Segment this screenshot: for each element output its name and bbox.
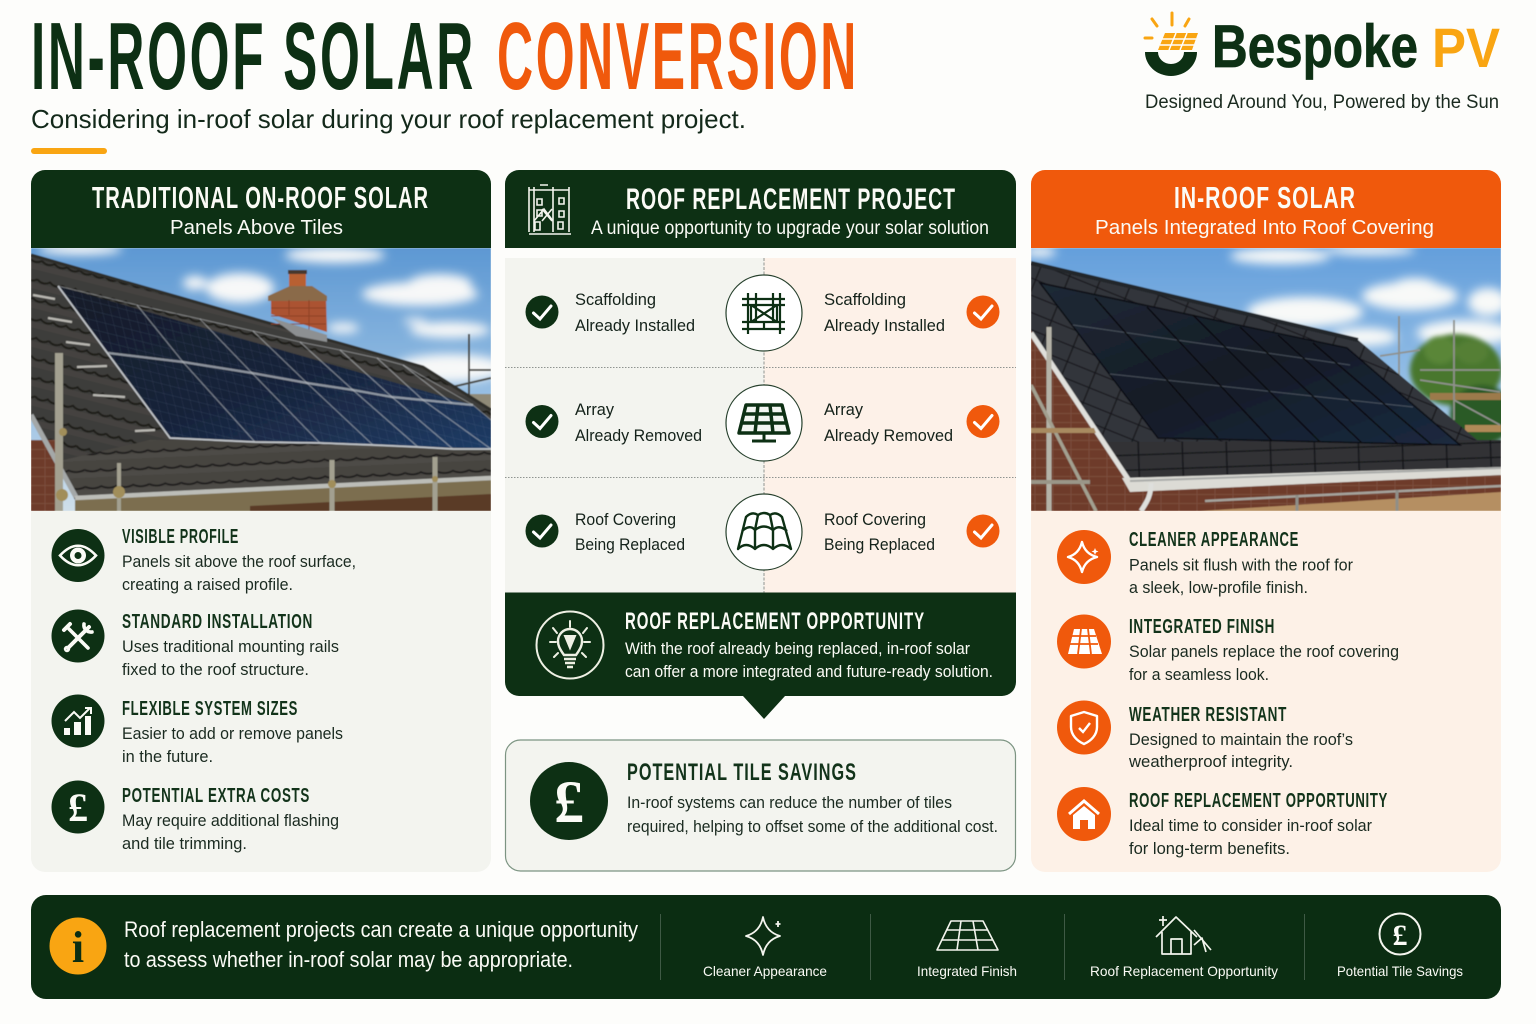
item: weather resistant [1057,700,1353,771]
mounting rails [33,295,155,431]
panel: traditional on-roof solar [31,170,505,872]
row: scaffolding: Already Installed [824,316,945,335]
callout: roof replacement opportunity: can offer a more integrated and future-ready solution. [625,663,993,681]
row: array: Array [824,400,863,419]
item: visible profile: Panels sit above the roof surface, [122,553,356,571]
row: array: Already Removed [575,426,702,445]
item: potential extra costs: May require additional flashing [122,812,339,830]
icon: left check [526,296,558,328]
item: potential extra costs [52,780,339,853]
callout: roof replacement opportunity: ROOF REPLACEMENT OPPORTUNITY [625,608,925,635]
footer message: to assess whether in-roof solar may be appropriate. [124,947,573,972]
item: weather resistant: WEATHER RESISTANT [1129,704,1287,726]
footer item: integrated finish [917,921,1017,979]
callout: potential tile savings: In-roof systems can reduce the number of tiles [627,794,952,812]
icon: pound outline: £ [1392,919,1408,952]
icon: right check [966,405,1000,438]
icon: left check [526,514,558,548]
row: roof covering: Roof Covering [575,510,676,529]
item: cleaner appearance: a sleek, low-profile finish. [1129,579,1308,597]
row: array [526,385,1000,461]
right panel header: IN-ROOF SOLAR [1174,180,1356,215]
footer item: integrated finish: Integrated Finish [917,963,1017,979]
item: integrated finish: Solar panels replace the roof covering [1129,643,1399,661]
logo: Bespoke PV: Designed Around You, Powered by the Sun [1145,92,1499,113]
chimney [289,272,306,287]
left panel header [31,170,491,248]
icon: pound: £ [554,769,584,835]
row: scaffolding [526,275,1000,351]
item: flexible system sizes: Easier to add or remove panels [122,725,343,743]
icon: sun and panel [1145,13,1198,76]
row: array: Array [575,400,614,419]
item: standard installation: STANDARD INSTALLATION [122,611,313,633]
callout: roof replacement opportunity: With the roof already being replaced, in-roof solar [625,640,970,658]
logo: Bespoke PV [1145,13,1500,113]
middle header [505,170,1016,248]
icon: info: i [72,923,84,972]
item: standard installation: fixed to the roof structure. [122,661,309,679]
scaffold and boards [1200,492,1501,511]
panel: in-roof solar [1024,170,1514,872]
item: integrated finish: INTEGRATED FINISH [1129,616,1275,638]
item: weather resistant: weatherproof integrity. [1128,753,1293,771]
item: flexible system sizes: FLEXIBLE SYSTEM SIZES [122,698,298,720]
icon: eye [52,529,104,582]
brick and eaves [31,440,56,511]
icon: right check [966,514,1000,548]
subtitle: Considering in-roof solar during your roof replacement project. [31,104,746,134]
row: roof covering: Roof Covering [824,510,926,529]
item: weather resistant: Designed to maintain the roof’s [1129,731,1353,749]
middle header: ROOF REPLACEMENT PROJECT [626,183,956,216]
item: roof replacement opportunity: for long-term benefits. [1129,840,1290,858]
item: standard installation: Uses traditional mounting rails [122,638,339,656]
comparison rows [505,258,1016,593]
footer band [31,895,1501,999]
title: CONVERSION [497,3,859,110]
accent bar [31,148,107,154]
integrated array [1040,283,1460,445]
footer item: potential tile savings: Potential Tile Savings [1337,963,1463,979]
middle header: A unique opportunity to upgrade your solar solution [591,218,989,239]
icon: scaffold [726,275,802,351]
item: cleaner appearance: CLEANER APPEARANCE [1129,529,1299,551]
item: visible profile: VISIBLE PROFILE [122,526,239,548]
item: flexible system sizes [52,694,343,766]
solar array [58,286,491,449]
icon: pound [52,780,104,834]
row: array: Already Removed [824,426,953,445]
icon: tiled array outline [937,921,998,950]
callout: potential tile savings [506,740,1016,871]
panel: roof replacement project [505,170,1016,871]
icon: crossed tools [52,610,104,662]
icon: roof tiles [726,494,802,570]
icon: growth chart [52,694,104,748]
icon: lightbulb [536,612,604,678]
icon: pound [530,762,608,840]
title: IN-ROOF SOLAR [31,3,476,110]
icon: scaffolded building [529,185,571,234]
icon: pound: £ [68,785,88,830]
photo: in-roof solar panels integrated into the roof [1024,245,1514,511]
footer item: cleaner appearance [703,917,827,979]
row: roof covering [526,494,1000,570]
footer item: potential tile savings [1337,914,1463,979]
left panel header: TRADITIONAL ON-ROOF SOLAR [92,180,429,215]
footer message [124,917,638,972]
roof [31,256,491,461]
callout: roof replacement opportunity [505,592,1016,719]
icon: shield [1057,700,1111,754]
logo: Bespoke PV: PV [1432,16,1500,79]
photo: on-roof solar panels above tiles [31,243,505,511]
icon: tiled panel [1057,614,1111,668]
icon: sparkle outline [746,917,780,955]
icon: solar panel [726,385,802,461]
icon: left check [526,405,558,438]
right panel header [1031,170,1501,248]
item: cleaner appearance: Panels sit flush with the roof for [1129,556,1353,574]
icon: sparkle [1057,530,1111,584]
right panel body [1031,240,1501,872]
item: potential extra costs: and tile trimming. [122,835,247,853]
footer item: roof replacement opportunity: Roof Replacement Opportunity [1090,963,1278,979]
row: roof covering: Being Replaced [824,535,935,554]
right panel header: Panels Integrated Into Roof Covering [1095,217,1434,239]
brick walls [1031,330,1130,511]
row: scaffolding: Already Installed [575,316,695,335]
left panel header: Panels Above Tiles [170,217,343,239]
callout: potential tile savings: required, helping to offset some of the additional cost. [627,818,998,836]
logo: Bespoke PV: Bespoke [1212,13,1418,80]
icon: right check [966,296,1000,328]
row: roof covering: Being Replaced [575,535,685,554]
item: roof replacement opportunity: ROOF REPLACEMENT OPPORTUNITY [1129,790,1388,812]
item: visible profile: creating a raised profile. [122,576,293,594]
item: visible profile [52,526,356,594]
row: scaffolding: Scaffolding [575,290,656,309]
roof [1031,264,1477,443]
icon: house [1057,787,1111,841]
footer item: cleaner appearance: Cleaner Appearance [703,963,827,979]
callout: potential tile savings: POTENTIAL TILE SAVINGS [627,759,857,786]
barge board and gutter [1031,333,1130,482]
icon: info [50,918,106,974]
footer item: roof replacement opportunity [1090,916,1278,979]
left panel body [31,240,491,872]
item: integrated finish: for a seamless look. [1129,666,1269,684]
item: roof replacement opportunity [1057,787,1388,858]
icon: house outline [1156,916,1211,954]
row: scaffolding: Scaffolding [824,290,906,309]
item: integrated finish [1057,614,1399,684]
item: roof replacement opportunity: Ideal time to consider in-roof solar [1129,817,1372,835]
footer message: Roof replacement projects can create a unique opportunity [124,917,638,942]
item: flexible system sizes: in the future. [122,748,213,766]
item: standard installation [52,610,339,679]
item: potential extra costs: POTENTIAL EXTRA COSTS [122,785,310,807]
item: cleaner appearance [1057,529,1353,597]
